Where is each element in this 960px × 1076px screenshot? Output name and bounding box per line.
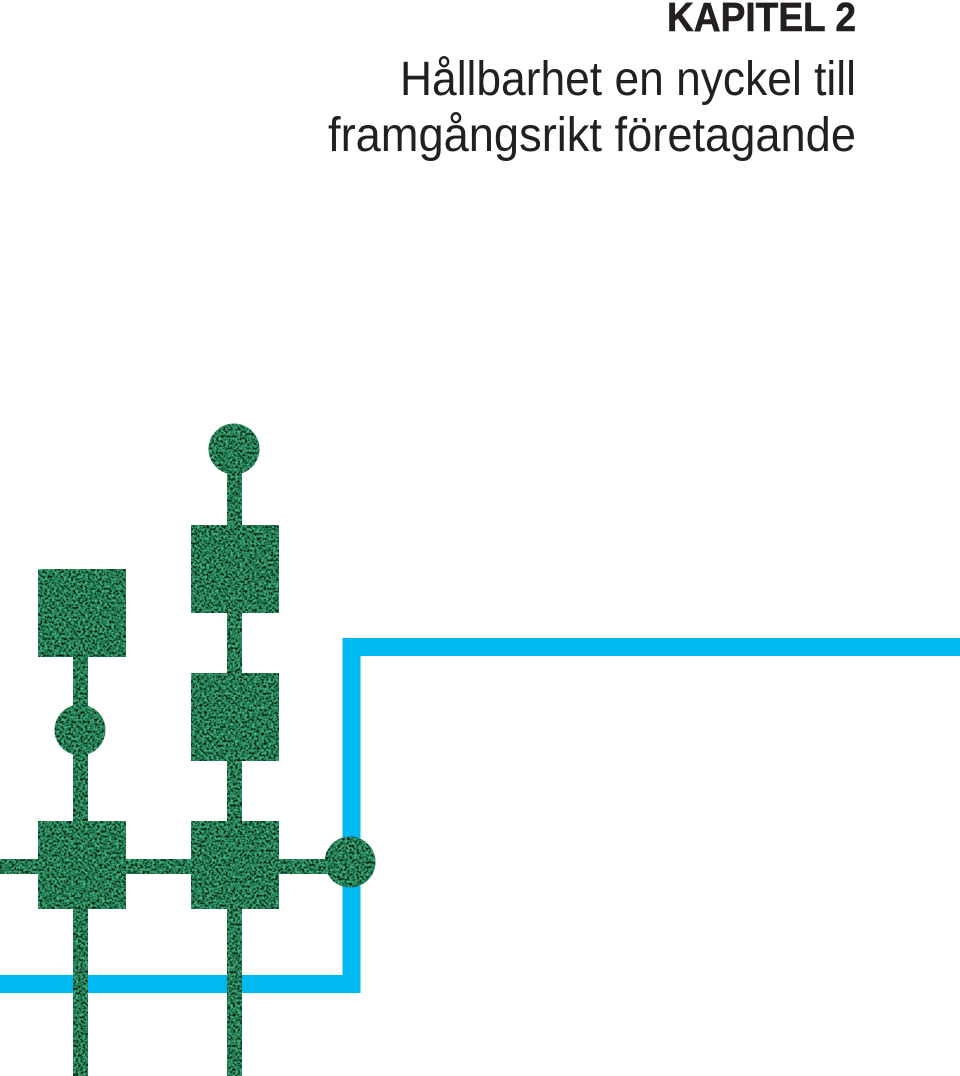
node: top circle [208, 424, 260, 474]
node: left circle [54, 704, 106, 756]
node: centre top square [191, 525, 279, 613]
node: left top square [38, 569, 126, 657]
green textured circuit diagram [0, 424, 376, 1076]
node: left bottom square [38, 821, 126, 909]
node: centre bottom square [191, 821, 279, 909]
title line 1: Hållbarhet en nyckel till [400, 53, 856, 106]
centre stem [227, 460, 242, 1076]
heading: chapter title [328, 0, 856, 162]
blue frame line [0, 647, 960, 984]
title line 2: framgångsrikt företagande [328, 109, 856, 162]
horizontal connector [0, 859, 340, 874]
left stem [73, 650, 88, 1076]
node: right circle on blue line [324, 836, 376, 888]
node: centre middle square [191, 673, 279, 761]
